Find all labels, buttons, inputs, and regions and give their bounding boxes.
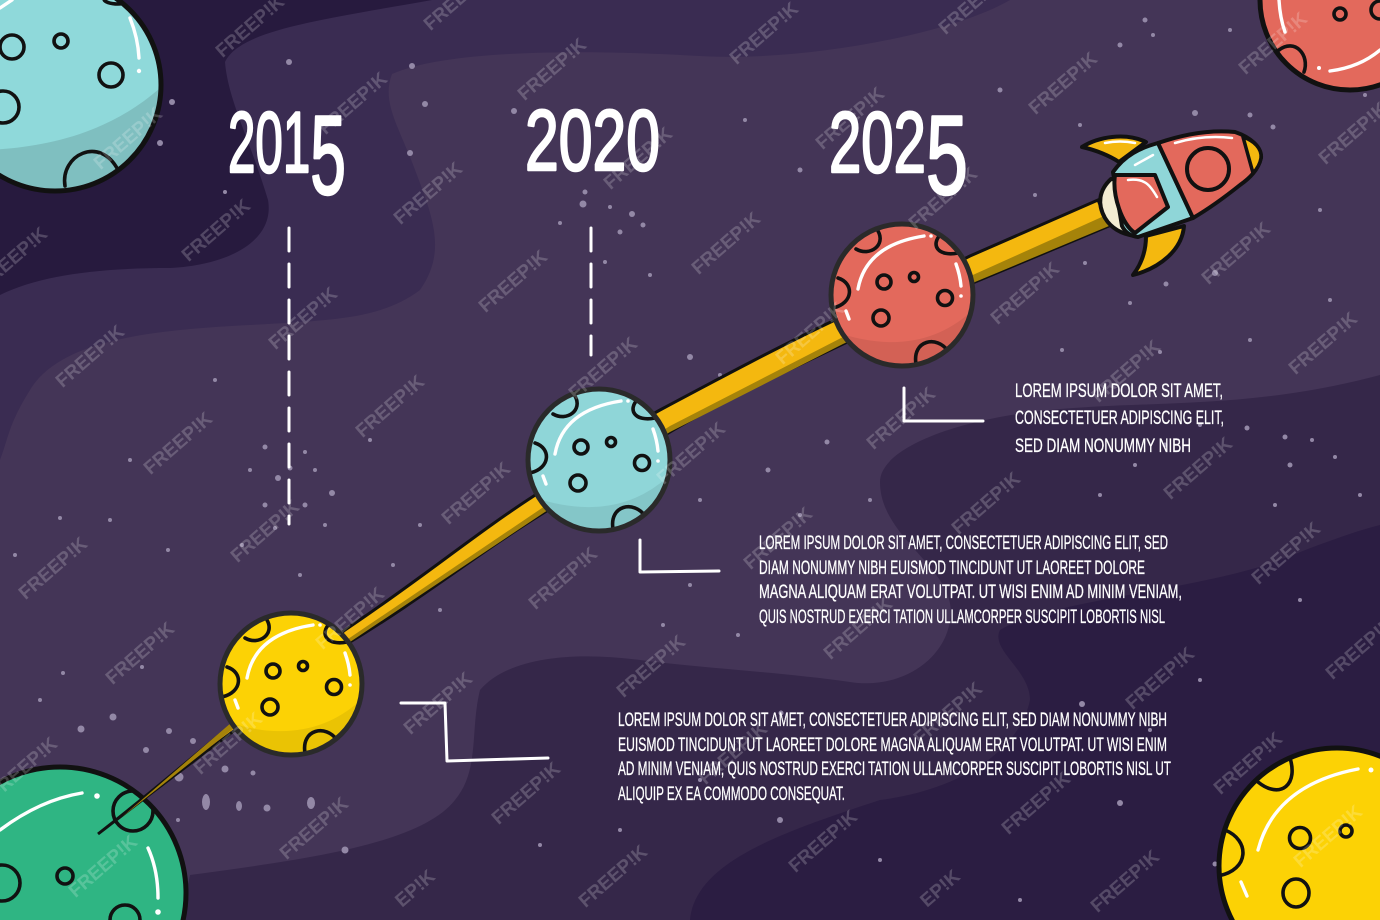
- watermark: FREEP!K: [1025, 48, 1102, 119]
- watermark: FREEP!K: [863, 383, 940, 454]
- watermark: FREEP!K: [1235, 8, 1312, 79]
- watermark: FREEP!K: [438, 458, 515, 529]
- watermark: FREEP!K: [190, 708, 267, 779]
- watermark: FREEP!K: [948, 468, 1025, 539]
- watermark: FREEP!K: [695, 718, 772, 789]
- text block: 2020: [759, 533, 1182, 628]
- watermark: FREEP!K: [1210, 728, 1287, 799]
- watermark: FREEP!K: [740, 503, 817, 574]
- watermark: FREEP!K: [600, 123, 677, 194]
- dashed line: 2020: [590, 228, 592, 355]
- year: 2025: 202: [829, 95, 972, 191]
- watermark: FREEP!K: [400, 668, 477, 739]
- rocket cabin: [1114, 175, 1168, 233]
- rocket window: [1187, 148, 1229, 190]
- watermark: FREEP!K: [90, 103, 167, 174]
- watermark: FREEP!K: [726, 0, 803, 69]
- text block: 2025: LOREM IPSUM DOLOR SIT AMET,: [1015, 381, 1223, 402]
- watermark: FREEP!K: [910, 678, 987, 749]
- planet: 2020 blue: [519, 389, 679, 540]
- rocket nose: [1158, 131, 1261, 218]
- connector: 2015: [401, 703, 548, 761]
- rocket fin: bottom: [1133, 226, 1184, 275]
- year: 2025: 5: [926, 93, 968, 218]
- watermark: FREEP!K: [15, 533, 92, 604]
- watermark: FREEP!K: [52, 321, 129, 392]
- bottom-left planet: [0, 767, 186, 920]
- watermark: FREEP!K: [653, 418, 730, 489]
- dashed line: 2015: [288, 228, 290, 524]
- rocket highlights: [1105, 137, 1232, 197]
- watermark: FREEP!K: [315, 68, 392, 139]
- text block: 2015: ALIQUIP EX EA COMMODO CONSEQUAT.: [618, 784, 845, 805]
- watermark: FREEP!K: [390, 158, 467, 229]
- top-right planet: [1260, 0, 1380, 90]
- year: 2020: 2020: [525, 93, 660, 189]
- watermark: FREEP!K: [1290, 801, 1367, 872]
- watermark: FREEP!K: [1088, 336, 1165, 407]
- watermark: FREEP!K: [525, 543, 602, 614]
- watermark: FREEP!K: [613, 631, 690, 702]
- watermark: EP!K: [392, 866, 440, 912]
- rocket fin: top: [1082, 137, 1146, 162]
- rocket: [1082, 131, 1261, 275]
- watermark: FREEP!K: [772, 298, 849, 369]
- watermark: FREEP!K: [475, 246, 552, 317]
- watermark: FREEP!K: [785, 806, 862, 877]
- watermark: FREEP!K: [575, 841, 652, 912]
- watermark: FREEP!K: [312, 583, 389, 654]
- text block: 2020: DIAM NONUMMY NIBH EUISMOD TINCIDUNT UT LAOREET DOLORE: [759, 558, 1145, 579]
- watermark: FREEP!K: [565, 333, 642, 404]
- watermark: FREEP!K: [1248, 518, 1325, 589]
- text block: 2025: [1015, 381, 1224, 457]
- watermark: FREEP!K: [812, 83, 889, 154]
- watermark: FREEP!K: [1285, 308, 1362, 379]
- watermark: FREEP!K: [227, 496, 304, 567]
- connector: 2025: [904, 388, 983, 421]
- watermark: FREEP!K: [178, 195, 255, 266]
- text block: 2015: [618, 710, 1171, 805]
- connector: 2020: [640, 540, 719, 572]
- watermark: FREEP!K: [987, 258, 1064, 329]
- planet: 2015 yellow: [211, 613, 371, 764]
- watermark: FREEP!K: [905, 163, 982, 234]
- watermark: FREEP!K: [1122, 643, 1199, 714]
- year: 2015: 5: [310, 93, 346, 218]
- year: 2015: 201: [228, 95, 372, 191]
- watermark: FREEP!K: [488, 758, 565, 829]
- text block: 2025: SED DIAM NONUMMY NIBH: [1015, 436, 1191, 457]
- text block: 2025: CONSECTETUER ADIPISCING ELIT,: [1015, 408, 1224, 429]
- watermark: FREEP!K: [1087, 846, 1164, 917]
- watermark: FREEP!K: [352, 371, 429, 442]
- watermark: EP!K: [917, 866, 965, 912]
- rocket nozzle: [1100, 179, 1135, 236]
- watermark: FREEP!K: [1198, 218, 1275, 289]
- watermark: FREEP!K: [276, 793, 353, 864]
- watermark: FREEP!K: [998, 768, 1075, 839]
- rocket body: blue section: [1113, 143, 1193, 237]
- watermark: FREEP!K: [265, 283, 342, 354]
- rocket tip: [1243, 137, 1261, 173]
- text block: 2020: MAGNA ALIQUAM ERAT VOLUTPAT. UT WISI ENIM AD MINIM VENIAM,: [759, 582, 1182, 603]
- top-left planet: [0, 0, 170, 200]
- planet: 2025 red: [822, 224, 982, 375]
- bottom-right planet: [1218, 748, 1380, 920]
- watermark: FREEP!K: [514, 34, 591, 105]
- watermark: FREEP!K: [1160, 433, 1237, 504]
- watermark: FREEP!K: [102, 618, 179, 689]
- watermark: FREEP!K: [140, 408, 217, 479]
- watermark: FREEP!K: [820, 593, 897, 664]
- watermark: FREEP!K: [65, 831, 142, 902]
- rocket trail: [98, 200, 1109, 834]
- watermark: FREEP!K: [688, 208, 765, 279]
